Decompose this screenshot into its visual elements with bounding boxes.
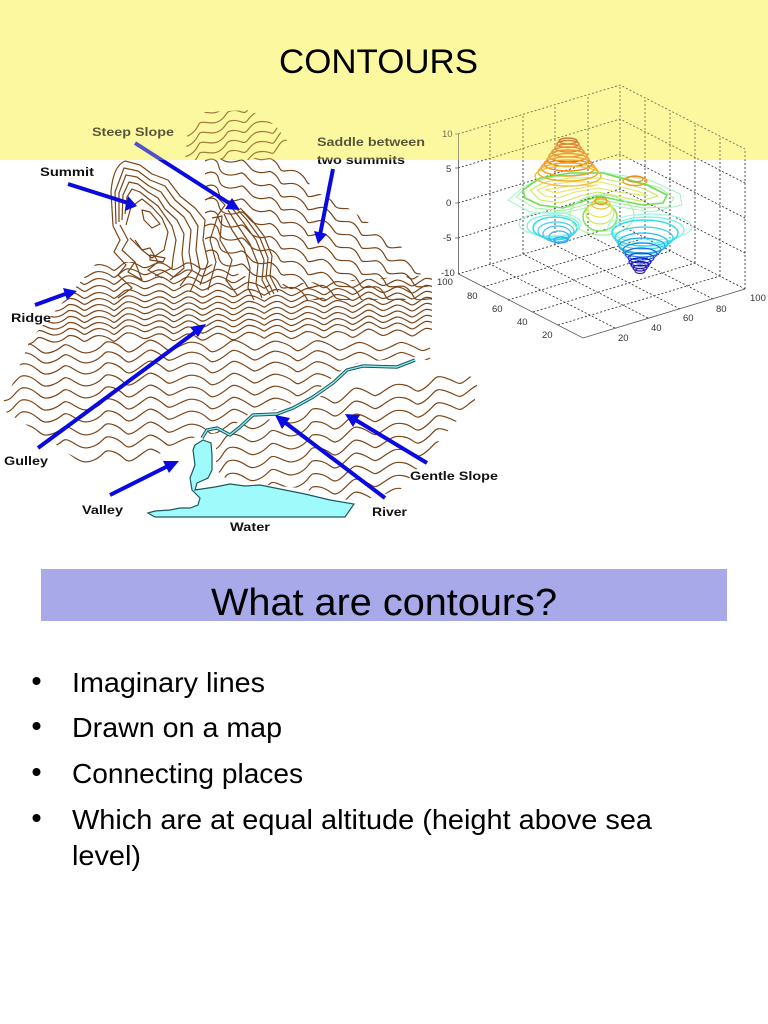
- small centre peak contours: [570, 195, 634, 235]
- axis numbers: 60: [683, 313, 694, 324]
- map labels: Steep Slope: [92, 125, 174, 139]
- axis numbers: 80: [716, 304, 727, 315]
- small right peak contours: [623, 176, 647, 186]
- bullet list: Imaginary lines: [72, 667, 265, 698]
- map labels: Gulley: [4, 454, 48, 468]
- yellow header band: [0, 0, 768, 160]
- contour lines: lower right slopes: [216, 376, 478, 500]
- deep right bowl contours: [608, 214, 692, 274]
- map labels: two summits: [317, 153, 405, 167]
- axis numbers: 10: [442, 129, 453, 140]
- subheading band: [41, 569, 727, 624]
- arrow: river: [275, 415, 385, 498]
- map labels: Ridge: [11, 311, 51, 325]
- bullet list: Connecting places: [72, 758, 303, 789]
- left bowl contours: [519, 212, 581, 243]
- map labels: Water: [230, 520, 270, 534]
- bullet list: [32, 667, 652, 871]
- axis numbers: 60: [492, 304, 503, 315]
- arrows: [35, 143, 427, 498]
- chart axes: [455, 134, 745, 338]
- outer plateau contours: [508, 172, 682, 214]
- contour map: [4, 110, 498, 531]
- axis numbers: 40: [517, 317, 528, 328]
- map labels: Gentle Slope: [410, 469, 498, 483]
- axis numbers: -5: [443, 233, 451, 244]
- bullet list: Drawn on a map: [72, 712, 282, 743]
- axis numbers: 100: [437, 277, 453, 288]
- contour lines: top ridge: [185, 110, 288, 160]
- water body: [148, 440, 354, 517]
- axis numbers: 20: [618, 333, 629, 344]
- arrow: gentle slope: [345, 414, 427, 463]
- chart grid: [458, 85, 745, 328]
- axis numbers: 5: [446, 164, 451, 175]
- subheading band: What are contours?: [211, 582, 557, 624]
- axis numbers: 100: [750, 293, 766, 304]
- bullet list: Which are at equal altitude (height above sea: [72, 804, 652, 835]
- axis numbers: 80: [467, 291, 478, 302]
- map labels: Saddle between: [317, 135, 425, 149]
- arrow: saddle: [314, 169, 333, 244]
- map labels: River: [372, 505, 407, 519]
- axis numbers: 0: [446, 198, 451, 209]
- axis numbers: -10: [441, 268, 455, 279]
- arrow: summit: [68, 184, 137, 211]
- 3D contour chart: [437, 85, 766, 344]
- map labels: [4, 125, 498, 534]
- axis numbers: 20: [542, 330, 553, 341]
- arrow: gulley: [38, 324, 206, 448]
- arrow: steep slope: [135, 143, 240, 210]
- axis numbers: [437, 129, 766, 344]
- yellow overlay tinting the images: [0, 0, 768, 160]
- contour lines: steep slope: [205, 195, 278, 300]
- arrow: valley: [110, 461, 179, 495]
- axis numbers: 40: [651, 323, 662, 334]
- map labels: Summit: [40, 165, 94, 179]
- bullet list: level): [72, 840, 141, 871]
- contour lines: central band and lower left slopes: [4, 262, 432, 462]
- main peak contours: [535, 138, 601, 186]
- river: [202, 360, 415, 438]
- contour lines: saddle slope: [205, 158, 432, 300]
- contour lines: summit nest: [111, 161, 208, 298]
- title: CONTOURS: [279, 43, 478, 81]
- arrow: ridge: [35, 288, 77, 305]
- map labels: Valley: [82, 503, 123, 517]
